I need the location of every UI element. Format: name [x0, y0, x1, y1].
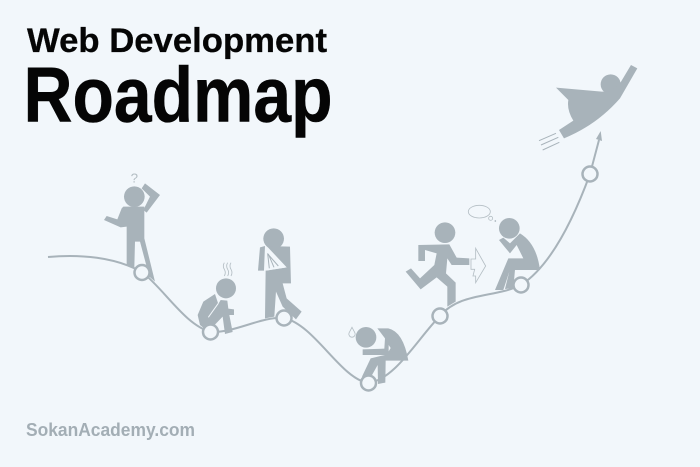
figure: running person [406, 222, 486, 307]
title: Web Development: Web Development [27, 22, 327, 60]
roadmap milestones [134, 166, 598, 390]
arrow head [596, 131, 602, 141]
thought bubble [468, 205, 493, 220]
figure: crouching person [198, 263, 236, 334]
question mark: ? [131, 171, 138, 186]
footer: site name: SokanAcademy.com [26, 420, 195, 440]
figure: thinking person [468, 205, 540, 290]
roadmap curve [48, 140, 599, 383]
sweat drop [349, 327, 355, 337]
figure: slumped person [349, 327, 408, 384]
figure: confused person [104, 171, 160, 282]
steam lines [223, 263, 232, 276]
title: Roadmap: Roadmap [24, 50, 332, 138]
speed lines [539, 133, 559, 150]
figure: person with arm sling [258, 228, 302, 319]
figure: flying hero [539, 65, 637, 150]
outlined arrow [471, 248, 486, 283]
